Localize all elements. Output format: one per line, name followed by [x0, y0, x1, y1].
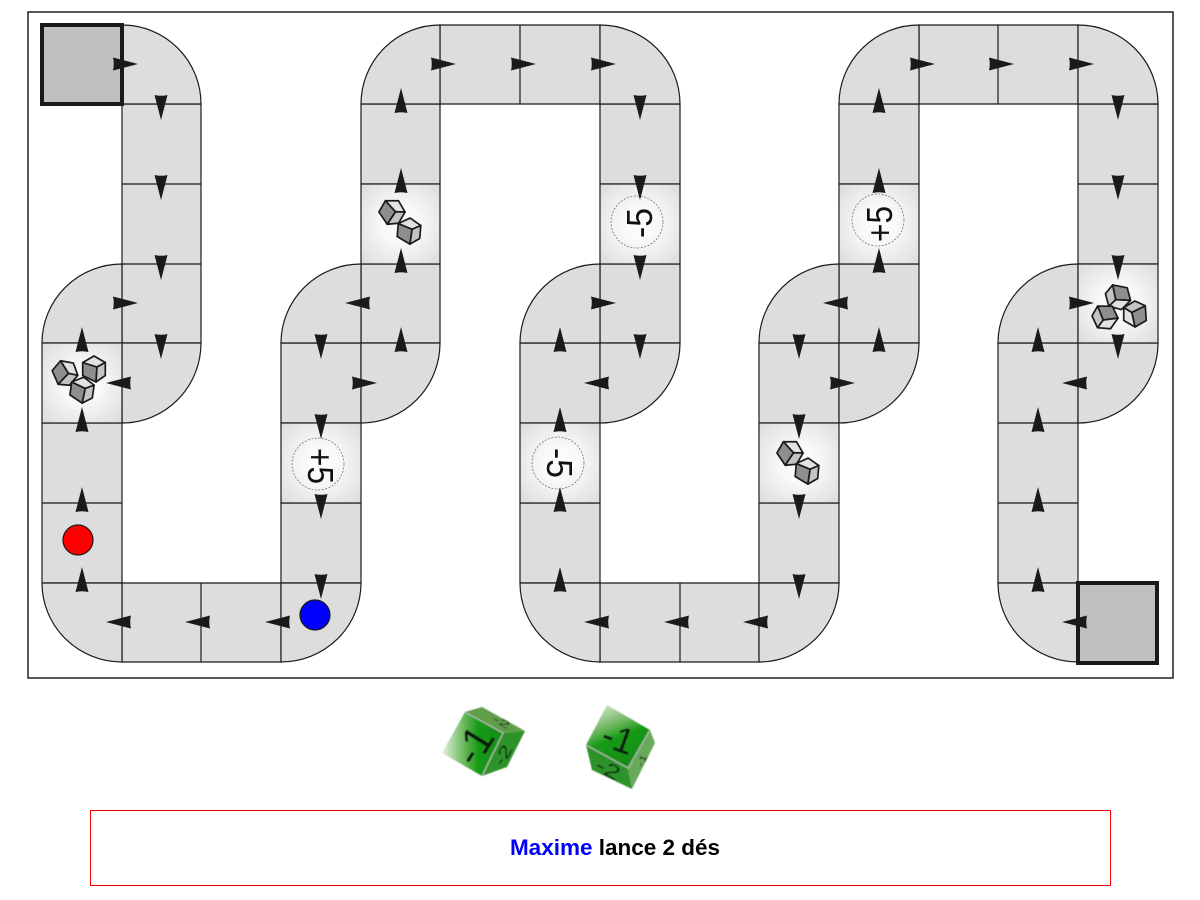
red player token — [63, 525, 93, 555]
special cell: two dice, top — [361, 184, 440, 264]
blue player token — [300, 600, 330, 630]
finish square — [1078, 583, 1157, 663]
special cell: +5 bonus, first column — [281, 423, 361, 503]
special cell: -5 penalty, bottom — [520, 423, 600, 503]
special cell: +5 bonus, first column: +5 — [300, 448, 341, 484]
green die, right: -2 — [592, 754, 624, 785]
green die, left: -1 — [444, 717, 504, 774]
start square — [42, 25, 122, 104]
message box: Maxime lance 2 dés — [510, 835, 720, 860]
message box — [90, 810, 1110, 886]
special cell: -5 penalty, top — [600, 184, 680, 264]
board frame — [28, 12, 1173, 678]
green die, left: -2 — [490, 741, 517, 769]
green die, right — [586, 705, 655, 789]
special cell: +5 bonus, top: +5 — [859, 206, 900, 242]
direction arrows — [76, 58, 1124, 628]
special cell: -5 penalty, top: -5 — [619, 208, 660, 238]
special cell: three dice, left — [42, 343, 122, 423]
green die, left — [442, 707, 525, 776]
special cell: three dice, right — [1078, 264, 1158, 343]
special cell: +5 bonus, top — [839, 184, 919, 264]
special cell: two dice, bottom — [759, 423, 839, 503]
special cell: -5 penalty, bottom: -5 — [539, 448, 580, 478]
green die, right: -1 — [596, 714, 640, 763]
green die, right: -1 — [634, 752, 650, 769]
green die, left: -2 — [491, 714, 512, 731]
track cells — [42, 25, 1158, 662]
